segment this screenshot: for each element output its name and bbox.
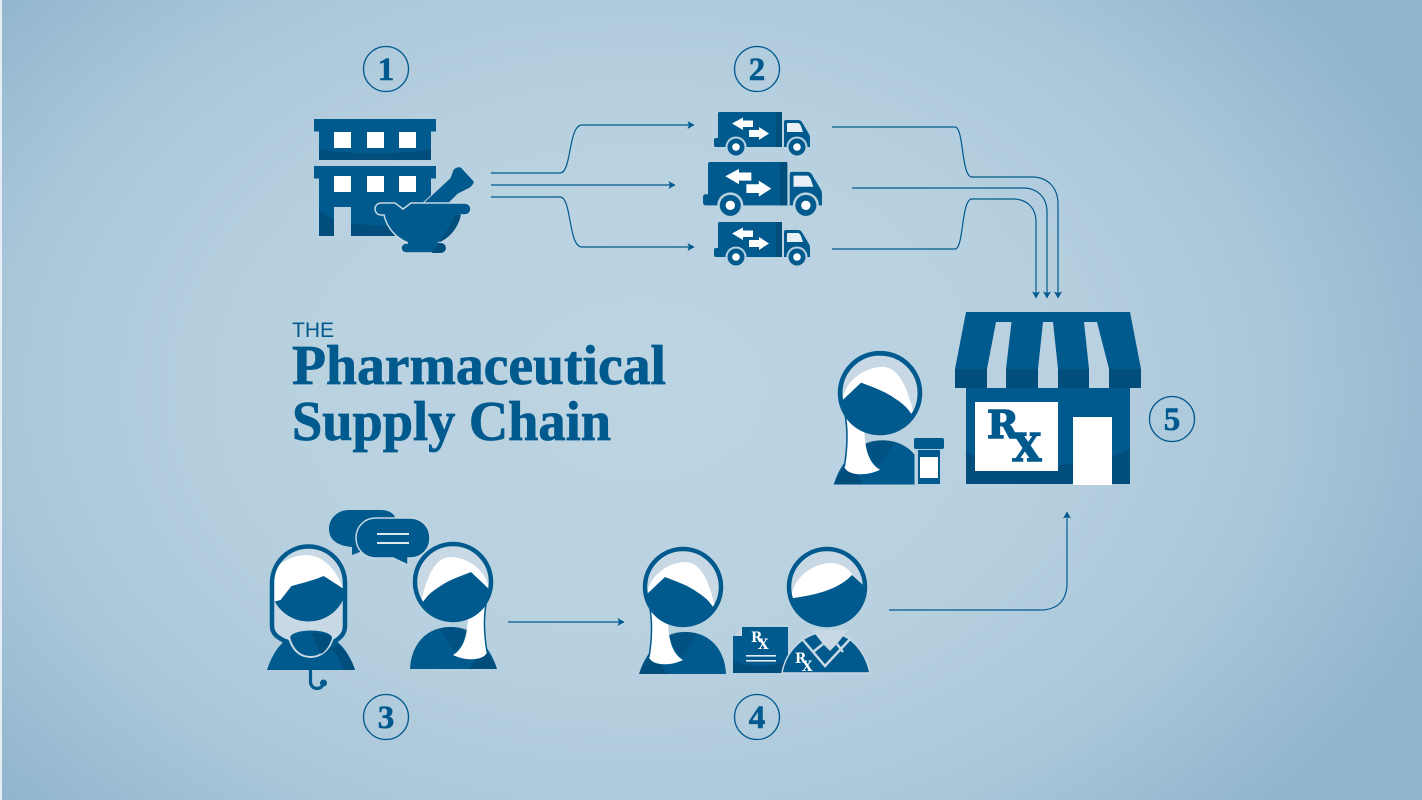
icon: patient in consultation (410, 544, 497, 669)
pestle (422, 167, 474, 204)
Rx badge: X (802, 659, 813, 675)
Rx sign: X (1012, 425, 1042, 470)
number 5 (1150, 396, 1194, 442)
number 3 (364, 694, 408, 740)
icon: pharmacist (782, 549, 870, 675)
stethoscope (289, 630, 333, 657)
icon: pharmaceutical factory with mortar and pestle (314, 119, 474, 253)
icon: patient with medicine at pharmacy (834, 353, 946, 487)
title: Pharmaceutical (292, 335, 666, 397)
icon: speech bubbles (329, 510, 430, 565)
icon: prescription paper (733, 627, 788, 673)
icon: doctor (267, 546, 355, 688)
icon: pharmacy storefront (955, 312, 1141, 485)
arrows: trucks to pharmacy (832, 127, 1058, 298)
collar (803, 630, 852, 666)
number 1 (364, 46, 408, 92)
Rx badge (795, 651, 813, 675)
number 1: 1 (378, 52, 394, 88)
arrow: prescription to pharmacy (889, 512, 1067, 610)
title: THE (292, 319, 334, 342)
number 4 (734, 694, 780, 740)
number 4: 4 (749, 700, 765, 736)
number 3: 3 (378, 700, 394, 736)
icon: prescription paper: R (751, 630, 763, 646)
mortar bowl (375, 203, 471, 253)
arrows: factory to trucks (491, 125, 694, 247)
icon: pill bottle (914, 438, 944, 484)
title: Supply Chain (292, 391, 611, 453)
icon: patient receiving prescription (639, 549, 726, 674)
Rx sign: R (987, 402, 1019, 447)
number 5: 5 (1164, 402, 1180, 438)
Rx badge: R (795, 651, 807, 667)
icon: prescription paper: X (758, 637, 769, 653)
number 2 (734, 46, 780, 92)
icon: middle truck (703, 162, 822, 218)
title (292, 319, 666, 453)
icon: bottom truck (714, 222, 810, 268)
Rx sign (987, 402, 1042, 470)
icon: top truck (714, 112, 810, 158)
number 2: 2 (749, 52, 765, 88)
arrow: doctor and patient to prescription (508, 621, 624, 623)
